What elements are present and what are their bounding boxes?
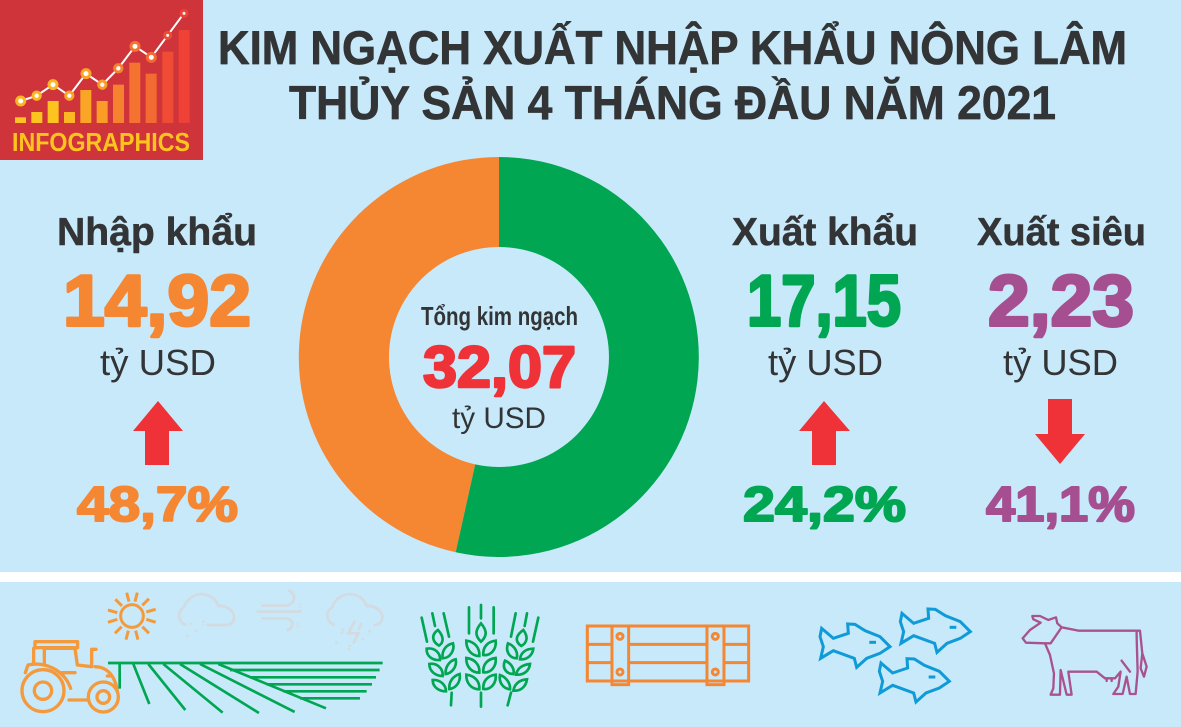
logo label: INFOGRAPHICS — [12, 127, 190, 157]
center total — [421, 301, 578, 435]
panel: trade surplus — [977, 211, 1146, 532]
center total: tỷ USD — [452, 402, 546, 435]
icon: storm cloud — [327, 594, 382, 650]
panel: import: 14,92 — [63, 262, 251, 342]
panel: export: 17,15 — [747, 262, 901, 342]
arrow up — [133, 401, 183, 465]
icon: tractor — [22, 642, 118, 712]
donut chart: total trade — [299, 157, 699, 557]
icon: wheat — [422, 605, 538, 707]
panel: trade surplus: Xuất siêu — [977, 211, 1146, 254]
donut segment: export — [456, 157, 699, 557]
icon: fish — [820, 609, 970, 702]
panel: import: tỷ USD — [100, 342, 216, 383]
icon: sun — [108, 593, 156, 640]
icon: wind — [257, 590, 302, 631]
icon: cow — [1023, 616, 1147, 695]
arrow up — [799, 401, 850, 465]
logo: infographics badge — [0, 0, 203, 160]
icon: wooden crate — [587, 626, 749, 685]
panel: export: tỷ USD — [768, 342, 883, 383]
title — [218, 21, 1127, 129]
panel: trade surplus: 41,1% — [986, 478, 1135, 532]
icon: rain cloud — [179, 594, 234, 638]
title: THỦY SẢN 4 THÁNG ĐẦU NĂM 2021 — [289, 76, 1056, 129]
title: KIM NGẠCH XUẤT NHẬP KHẨU NÔNG LÂM — [218, 21, 1127, 74]
center total: 32,07 — [423, 335, 576, 400]
panel: export: Xuất khẩu — [732, 211, 918, 254]
icon: ploughed field — [108, 663, 383, 713]
panel: export — [732, 211, 918, 532]
panel: import — [57, 211, 257, 532]
panel: trade surplus: 2,23 — [988, 262, 1134, 342]
logo bar chart — [15, 10, 190, 123]
center total: Tổng kim ngạch — [421, 301, 578, 331]
donut segment: import — [299, 157, 499, 552]
panel: import: Nhập khẩu — [57, 211, 257, 254]
panel: trade surplus: tỷ USD — [1003, 342, 1118, 383]
panel: import: 48,7% — [77, 478, 238, 532]
arrow down — [1035, 399, 1085, 464]
panel: export: 24,2% — [743, 478, 906, 532]
